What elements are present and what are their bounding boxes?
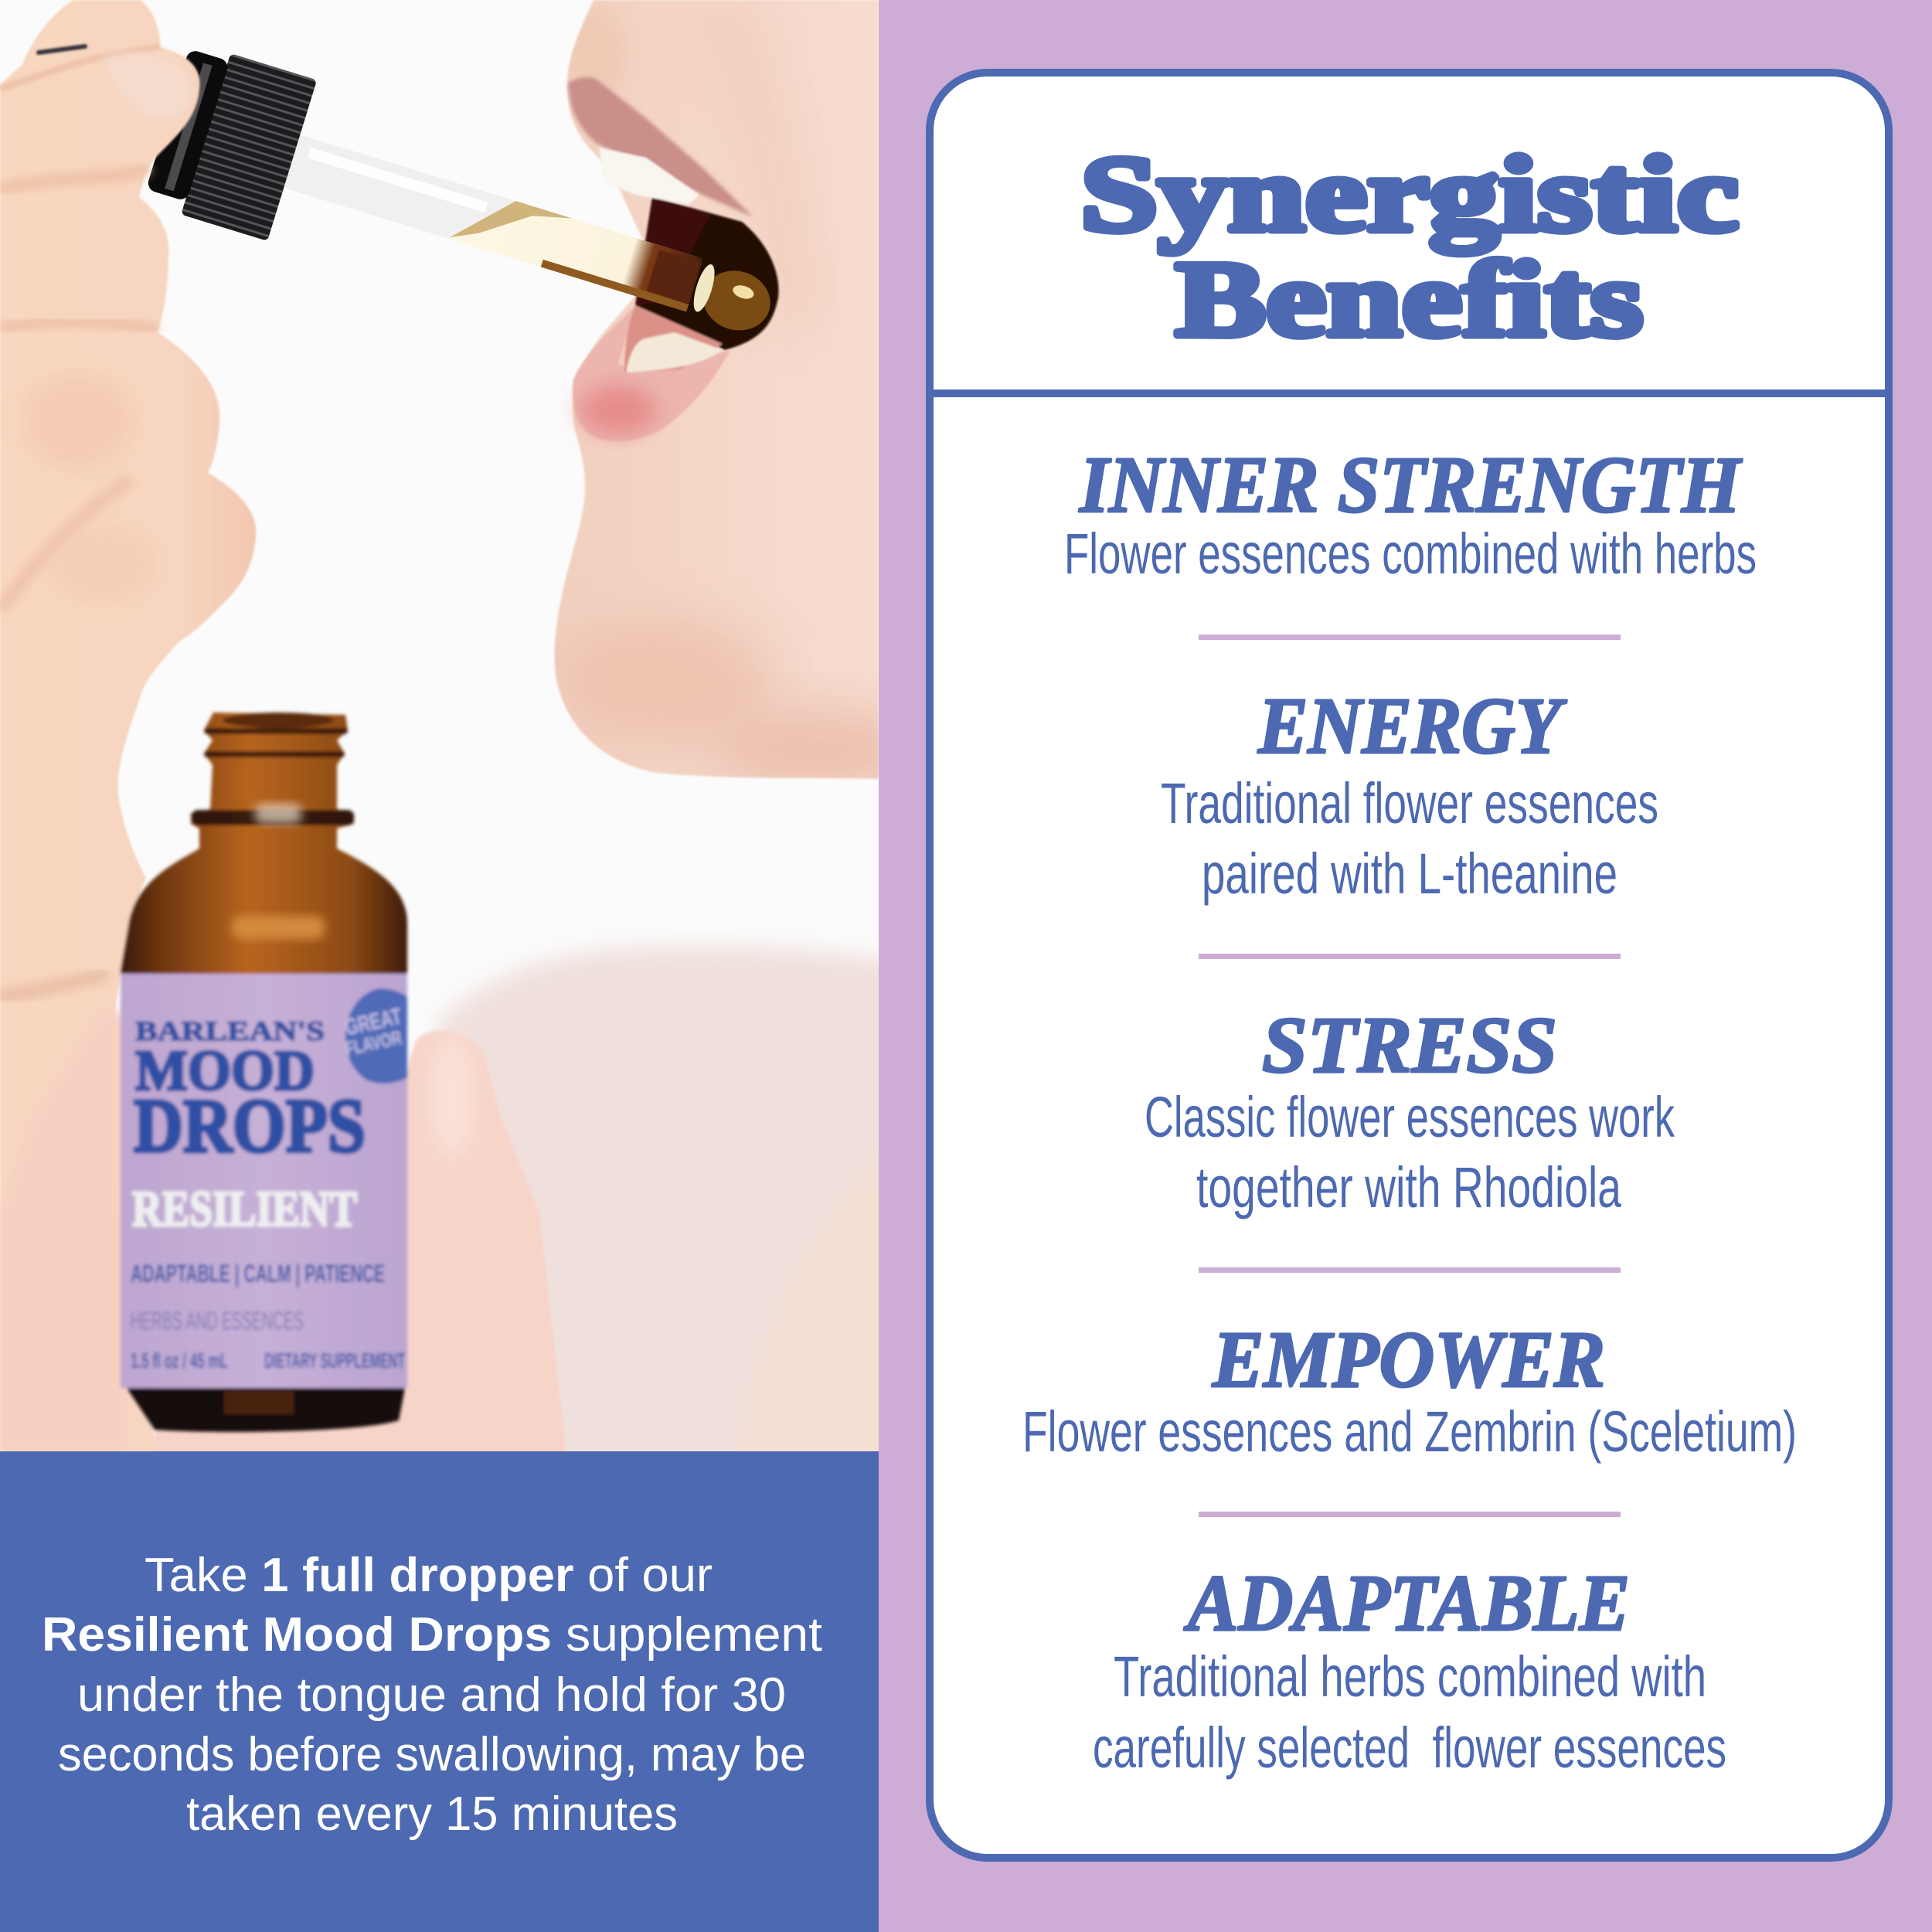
bottle label: 1.5 fl oz / 45 mL [131,1349,228,1372]
bottle label: BARLEAN'S [135,1015,325,1046]
benefit: inner strength [1064,440,1757,586]
bottle label: DROPS [134,1083,366,1168]
benefit: empower [1022,1315,1797,1464]
benefit: stress: Classic flower essences work [1145,1085,1675,1149]
bottle label: RESILIENT [132,1181,357,1237]
bottle label: ADAPTABLE | CALM | PATIENCE [131,1260,385,1287]
product bottle [121,713,407,1432]
benefit: stress [1145,1001,1675,1219]
hand [0,0,256,1451]
instruction panel [0,1451,879,1932]
lips and mouth [568,77,778,441]
benefit: adaptable: ADAPTABLE [1183,1559,1630,1648]
benefit: stress: together with Rhodiola [1196,1155,1622,1219]
benefit: inner strength: INNER STRENGTH [1078,440,1743,529]
instruction text: seconds before swallowing, may be [58,1728,806,1781]
benefit: energy: ENERGY [1257,682,1567,770]
bottle label [121,974,407,1388]
dropper cap [142,42,317,241]
title: Synergistic [1080,134,1739,254]
bottle label: HERBS AND ESSENCES [131,1307,304,1335]
title: Benefits [1175,240,1643,359]
bottle label: DIETARY SUPPLEMENT [264,1349,405,1372]
benefit: empower: EMPOWER [1212,1315,1605,1404]
benefit: energy: paired with L-theanine [1202,842,1617,906]
badge: great flavor: GREAT [342,1004,404,1041]
benefit: energy [1161,682,1658,906]
benefit: energy: Traditional flower essences [1161,771,1658,835]
instruction text: Resilient Mood Drops supplement [42,1608,822,1662]
instruction text: under the tongue and hold for 30 [77,1668,786,1722]
benefit: stress: STRESS [1262,1001,1557,1090]
bottle glass [121,713,407,1432]
instruction text [42,1549,822,1841]
benefit: adaptable [1093,1559,1726,1780]
instruction text: taken every 15 minutes [186,1787,678,1841]
panel: benefits card [930,73,1889,1858]
badge: great flavor [342,988,407,1083]
bottle label: MOOD [135,1039,315,1103]
title [1080,134,1739,359]
benefit: adaptable: Traditional herbs combined with [1114,1645,1706,1709]
face [553,0,879,781]
badge: great flavor: FLAVOR [343,1027,403,1060]
dropper [148,51,770,331]
fingers below bottle [155,1030,568,1468]
photo: person taking drops [0,0,927,1468]
shirt and shoulder [438,946,896,1468]
dropper glass tube [283,134,778,338]
instruction text: Take 1 full dropper of our [145,1549,713,1602]
